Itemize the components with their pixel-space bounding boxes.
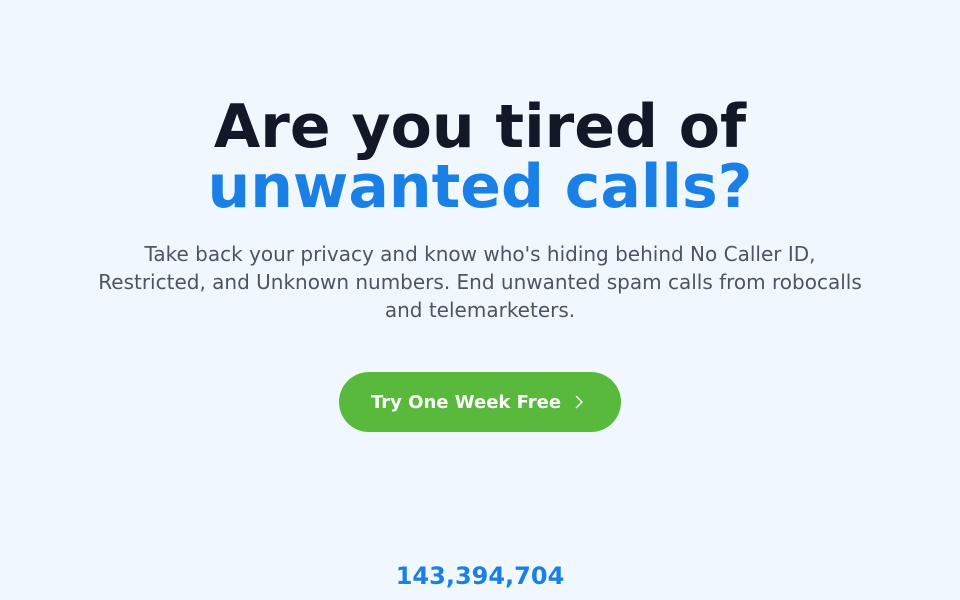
call to action button (339, 372, 621, 432)
title: Are you tired of (214, 92, 746, 162)
call counter: 143,394,704 (396, 562, 564, 590)
subtitle text: Restricted, and Unknown numbers. End unwanted spam calls from robocalls (98, 270, 862, 294)
title (208, 92, 752, 222)
call to action button: Try One Week Free (371, 392, 561, 413)
title: unwanted calls? (208, 152, 752, 222)
subtitle text: Take back your privacy and know who's hiding behind No Caller ID, (144, 242, 816, 266)
subtitle text (98, 242, 862, 322)
subtitle text: and telemarketers. (385, 298, 575, 322)
